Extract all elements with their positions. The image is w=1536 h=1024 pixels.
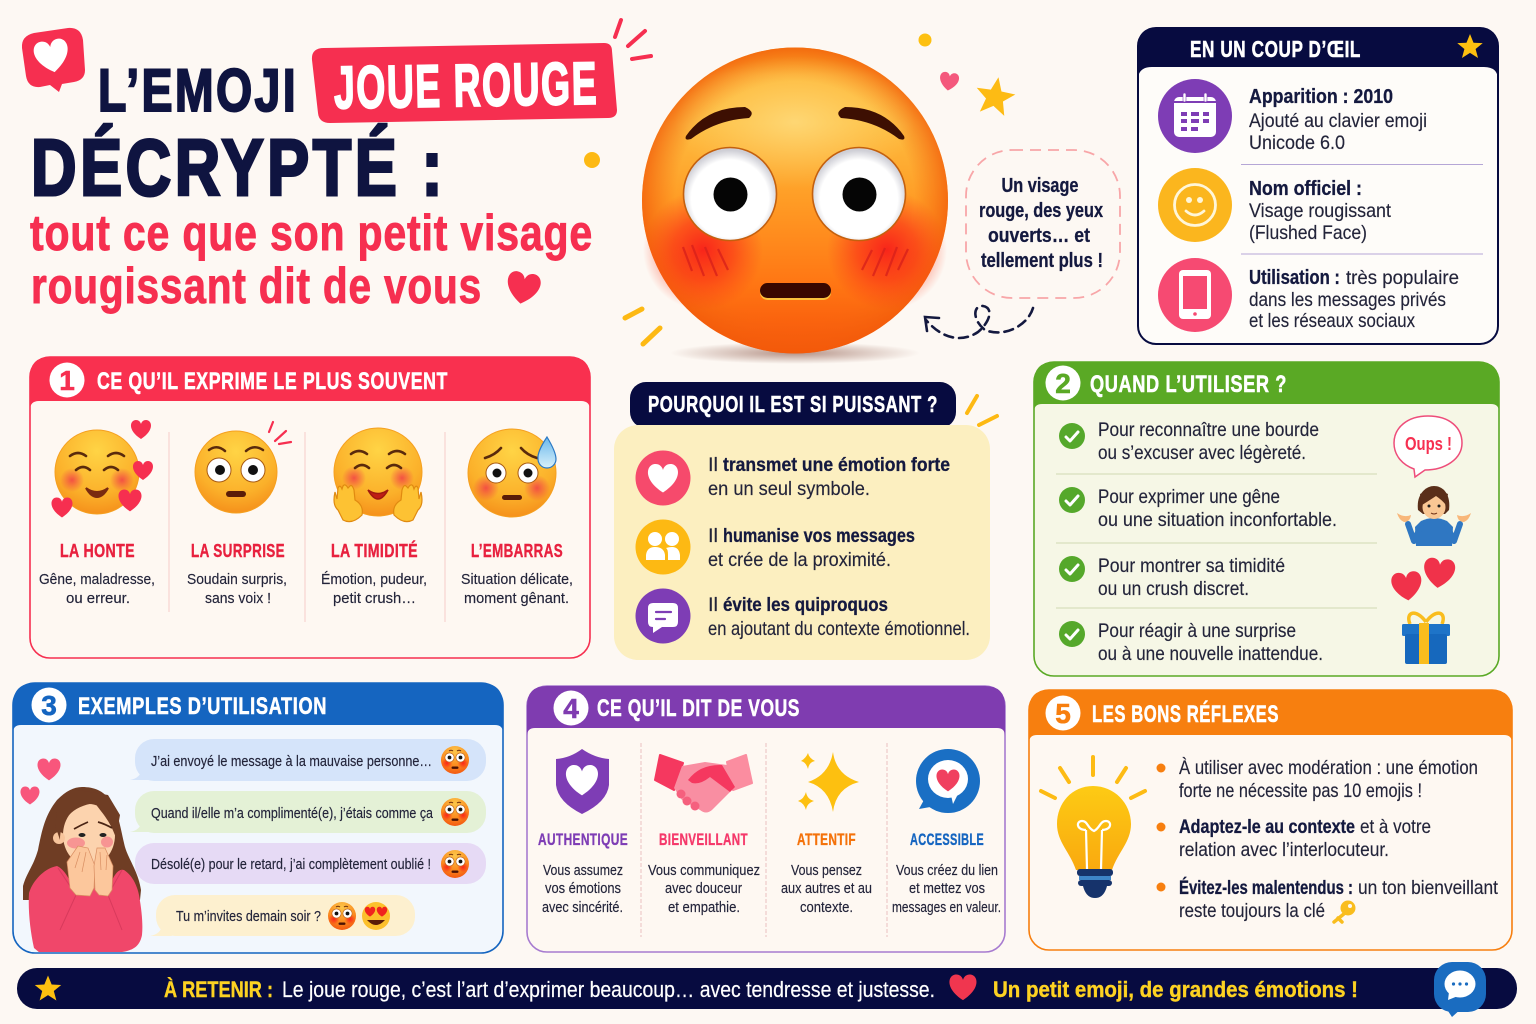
list text: ou s’excuser avec légèreté. — [1098, 442, 1306, 464]
text: nom officiel — [1249, 178, 1392, 244]
descriptions: traits: et empathie. — [668, 900, 740, 916]
banner slogan: Un petit emoji, de grandes émotions ! — [993, 977, 1358, 1002]
title block — [22, 28, 617, 314]
panel 5 header: LES BONS RÉFLEXES — [1092, 700, 1279, 728]
list text — [1098, 419, 1337, 665]
panel: pourquoi il est si puissant — [614, 382, 990, 660]
descriptions: traits: Vous communiquez — [648, 863, 760, 879]
labels: traits: ATTENTIF — [797, 831, 856, 849]
panel 5 header: 5 — [1055, 698, 1071, 729]
tab heading — [630, 382, 956, 428]
descriptions: traits: Vous pensez — [791, 863, 862, 879]
icon: smiley — [1158, 168, 1232, 242]
descriptions: emotions: sans voix ! — [205, 590, 271, 607]
list text: Pour reconnaître une bourde — [1098, 419, 1319, 441]
banner label: À RETENIR : — [164, 977, 273, 1002]
bottom banner: a retenir — [17, 962, 1517, 1017]
text: reflexes: relation avec l’interlocuteur. — [1179, 839, 1389, 861]
icon: calendar — [1158, 79, 1232, 153]
icon: hearts — [1390, 557, 1456, 602]
text: quiproquos: évite les quiproquos — [723, 594, 888, 616]
text: apparition: Unicode 6.0 — [1249, 132, 1345, 154]
panel 4 header: CE QU’IL DIT DE VOUS — [597, 695, 800, 722]
icon: light bulb — [1041, 757, 1145, 898]
bullets — [1156, 764, 1166, 892]
callout: dashed bubble — [966, 150, 1120, 298]
icon: handshake — [655, 755, 752, 812]
icon: heart — [636, 450, 690, 506]
chat bubble 3: Désolé(e) pour le retard, j’ai complètement oublié ! — [151, 857, 431, 873]
labels: emotions: LA TIMIDITÉ — [331, 540, 418, 561]
icon: chat bubble — [1434, 962, 1486, 1017]
descriptions: traits: avec douceur — [665, 881, 742, 897]
text: quiproquos: Il — [708, 594, 718, 616]
subtitle: tout ce que son petit visage — [30, 205, 593, 261]
icon: heart eyes emoji — [362, 902, 390, 930]
chat bubble 3 — [135, 843, 486, 884]
chat bubble 2: Quand il/elle m’a complimenté(e), j’étais comme ça — [151, 806, 434, 822]
text: utilisation: dans les messages privés — [1249, 289, 1446, 311]
labels: traits: ACCESSIBLE — [910, 831, 984, 849]
text: emotion: en un seul symbole. — [708, 478, 870, 500]
chat bubble 1: J’ai envoyé le message à la mauvaise personne… — [151, 754, 432, 770]
panel header — [1138, 28, 1498, 80]
panel 4: ce qu'il dit de vous — [527, 686, 1005, 952]
text: quiproquos — [708, 594, 970, 640]
panel 1 header: 1 — [59, 365, 75, 396]
panel 2: quand l'utiliser — [1034, 362, 1499, 676]
descriptions: emotions: petit crush… — [333, 590, 416, 607]
descriptions: traits: vos émotions — [545, 881, 621, 897]
text: emotion: Il — [708, 454, 718, 476]
list text: Pour montrer sa timidité — [1098, 555, 1285, 577]
descriptions: traits: Vous assumez — [543, 863, 623, 879]
text: nom officiel: Nom officiel : — [1249, 178, 1362, 200]
labels: traits — [538, 831, 984, 849]
descriptions: traits: avec sincérité. — [542, 900, 623, 916]
panel 2 header — [1034, 362, 1499, 412]
panel 4 header — [527, 686, 1005, 736]
descriptions: emotions: Soudain surpris, — [187, 571, 287, 588]
descriptions: emotions: Émotion, pudeur, — [321, 571, 427, 588]
text: utilisation: Utilisation : — [1249, 267, 1340, 289]
list text: ou un crush discret. — [1098, 578, 1249, 600]
heading highlight: JOUE ROUGE — [312, 43, 617, 123]
icon: people — [636, 520, 690, 574]
callout: dashed bubble: Un visage — [1002, 175, 1078, 197]
emoji: la timidite — [334, 428, 422, 522]
heading: L'EMOJI: L’EMOJI — [98, 57, 298, 124]
icon: smartphone — [1158, 258, 1232, 332]
hearts near girl — [20, 758, 61, 805]
descriptions: traits: et mettez vos — [909, 881, 985, 897]
list text: Pour exprimer une gêne — [1098, 486, 1280, 508]
text: reflexes — [1179, 756, 1499, 922]
text: proximite: et crée de la proximité. — [708, 549, 891, 571]
panel 1: ce qu'il exprime — [30, 357, 590, 658]
icon: chat heart — [22, 28, 85, 92]
labels: traits: AUTHENTIQUE — [538, 831, 628, 849]
descriptions: traits: Vous créez du lien — [896, 863, 998, 879]
panel header: EN UN COUP D’ŒIL — [1190, 36, 1361, 62]
icon: key — [1334, 900, 1356, 922]
labels: emotions — [60, 540, 563, 561]
panel 1 header: CE QU’IL EXPRIME LE PLUS SOUVENT — [97, 368, 448, 395]
icon: shrugging person — [1397, 486, 1471, 546]
panel 4 header: 4 — [563, 693, 579, 724]
text: reflexes: reste toujours la clé — [1179, 900, 1325, 922]
descriptions: traits — [542, 863, 1001, 916]
text: apparition — [1249, 86, 1427, 154]
icon: chat heart blue — [916, 749, 980, 813]
decorative sparks — [615, 20, 997, 425]
list text: ou à une nouvelle inattendue. — [1098, 643, 1323, 665]
chat bubble 2 — [130, 791, 486, 833]
check list icons — [1059, 423, 1085, 647]
descriptions: traits: messages en valeur. — [892, 900, 1001, 916]
icon: sparkles — [798, 752, 859, 812]
icon: chat — [636, 588, 690, 644]
illustration: embarrassed girl — [23, 787, 142, 953]
text: reflexes: un ton bienveillant — [1358, 877, 1499, 899]
text: utilisation: et les réseaux sociaux — [1249, 310, 1415, 332]
subtitle — [30, 205, 593, 314]
panel 2 header: 2 — [1055, 368, 1071, 399]
subtitle: rougissant dit de vous — [31, 258, 482, 314]
list text: Pour réagir à une surprise — [1098, 620, 1296, 642]
text: reflexes: forte ne nécessite pas 10 emojis ! — [1179, 780, 1422, 802]
text: utilisation — [1249, 267, 1459, 332]
icon: shield heart — [556, 749, 609, 814]
panel 5: les bons reflexes — [1029, 690, 1512, 950]
text: proximite: Il — [708, 525, 718, 547]
text: quiproquos: en ajoutant du contexte émotionnel. — [708, 618, 970, 640]
descriptions: traits: aux autres et au — [781, 881, 872, 897]
speech bubble: oups — [1394, 416, 1462, 477]
text: proximite: humanise vos messages — [723, 525, 915, 547]
panel 2 header: QUAND L’UTILISER ? — [1090, 371, 1287, 398]
callout: dashed bubble: tellement plus ! — [981, 250, 1103, 272]
emoji: l'embarras — [468, 429, 556, 517]
panel 3 header: EXEMPLES D’UTILISATION — [78, 693, 327, 720]
icon: gift — [1402, 613, 1450, 664]
emoji: la surprise — [195, 422, 291, 513]
heading highlight: JOUE ROUGE: JOUE ROUGE — [333, 50, 599, 121]
icon: heart — [949, 974, 977, 1000]
text: nom officiel: (Flushed Face) — [1249, 222, 1367, 244]
text: nom officiel: Visage rougissant — [1249, 200, 1392, 222]
panel 3: exemples d'utilisation — [13, 683, 503, 953]
text: reflexes: À utiliser avec modération : une émotion — [1179, 756, 1478, 779]
text: apparition: Ajouté au clavier emoji — [1249, 110, 1427, 132]
text: emotion — [708, 454, 950, 500]
descriptions: emotions: Gêne, maladresse, — [39, 571, 155, 588]
text: reflexes: Évitez-les malentendus : — [1179, 876, 1353, 899]
descriptions: emotions: ou erreur. — [66, 590, 130, 607]
text: proximite — [708, 525, 915, 571]
hero emoji: flushed face — [642, 48, 948, 364]
arrow: dashed loop to face — [925, 306, 1033, 338]
panel 3 header: 3 — [41, 690, 57, 721]
text: reflexes: et à votre — [1360, 816, 1431, 838]
labels: emotions: L’EMBARRAS — [471, 541, 563, 561]
icon: heart — [504, 270, 542, 306]
panel 1 header — [30, 357, 590, 410]
tab heading: POURQUOI IL EST SI PUISSANT ? — [648, 391, 938, 417]
chat bubble 4: Tu m’invites demain soir ? — [176, 909, 321, 925]
callout: dashed bubble: rouge, des yeux — [979, 200, 1103, 222]
text: reflexes: Adaptez-le au contexte — [1179, 816, 1355, 838]
list text: ou une situation inconfortable. — [1098, 509, 1337, 531]
callout: dashed bubble: ouverts… et — [988, 225, 1090, 247]
panel 5 header — [1029, 690, 1512, 743]
labels: emotions: LA HONTE — [60, 541, 135, 561]
speech bubble: oups: Oups ! — [1405, 434, 1452, 454]
banner message: Le joue rouge, c’est l’art d’exprimer beaucoup… avec tendresse et justesse. — [282, 977, 935, 1002]
labels: traits: BIENVEILLANT — [659, 831, 748, 849]
labels: emotions: LA SURPRISE — [191, 541, 285, 561]
icon: star — [35, 976, 61, 1000]
decorative dots, heart, star — [584, 34, 1018, 168]
descriptions: emotions: Situation délicate, — [461, 571, 573, 588]
chat bubble 1 — [130, 739, 486, 781]
descriptions: emotions: moment gênant. — [464, 590, 569, 607]
text: utilisation: très populaire — [1346, 267, 1459, 289]
heading: DÉCRYPTÉ: DÉCRYPTÉ : — [31, 123, 446, 212]
panel: en un coup d'oeil — [1138, 28, 1498, 344]
chat bubble 4 — [150, 895, 415, 936]
text: apparition: Apparition : 2010 — [1249, 86, 1393, 108]
emoji: la honte — [51, 420, 153, 517]
descriptions: emotions — [39, 571, 573, 607]
text: emotion: transmet une émotion forte — [723, 454, 950, 476]
panel 3 header — [13, 683, 503, 733]
descriptions: traits: contexte. — [800, 900, 853, 916]
